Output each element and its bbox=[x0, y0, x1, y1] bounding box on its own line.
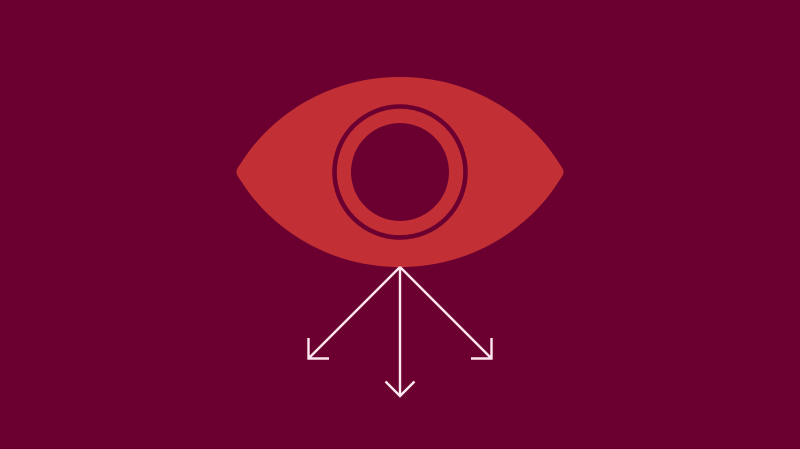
arrow: right bbox=[400, 267, 492, 358]
eye shape bbox=[236, 77, 564, 267]
iris ring bbox=[334, 106, 466, 238]
icon: eye bbox=[236, 77, 564, 267]
arrow: left bbox=[308, 267, 400, 358]
pupil bbox=[351, 123, 449, 221]
arrows pointing down and outward bbox=[308, 267, 492, 396]
arrow: centre bbox=[386, 267, 414, 396]
